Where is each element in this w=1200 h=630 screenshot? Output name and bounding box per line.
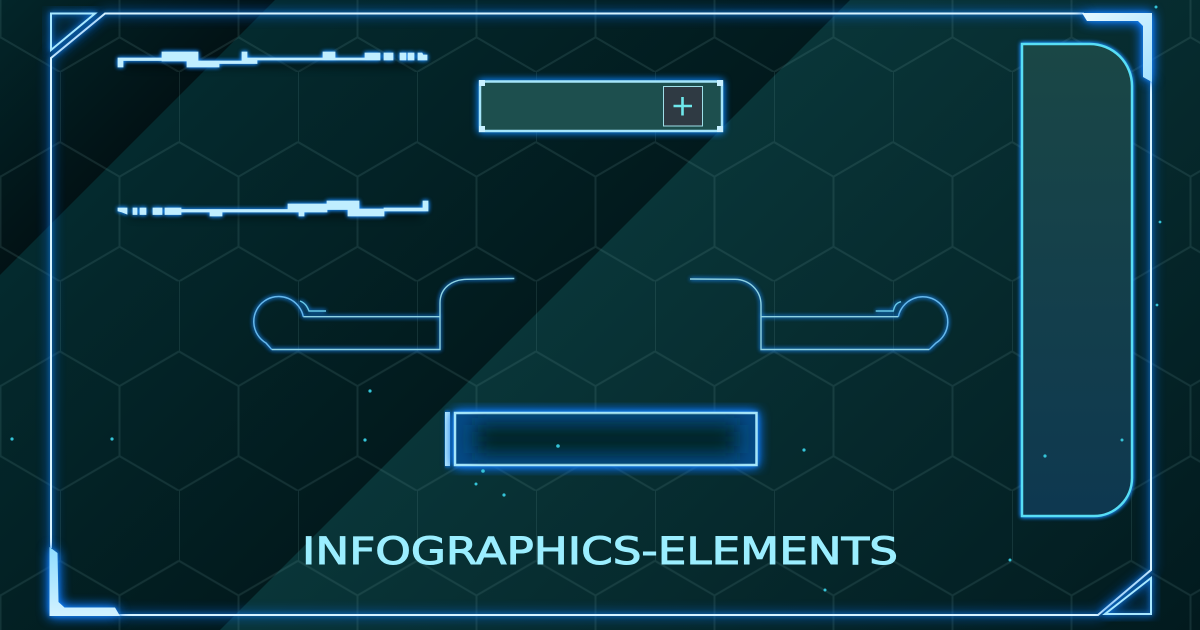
corner squares [479, 80, 723, 132]
plus button [664, 86, 702, 126]
tech divider bar: lower [118, 201, 428, 218]
bracket ornament: right [690, 279, 948, 350]
small accent [300, 301, 326, 311]
corner: top-right thick bracket [1082, 13, 1152, 82]
circular end [254, 297, 303, 350]
tall side panel [1022, 44, 1132, 516]
tech divider bar: top [118, 52, 427, 68]
button panel body [480, 82, 722, 131]
body lines [272, 278, 514, 350]
inner dark glow [475, 425, 737, 453]
corner: bottom-left thick bracket [50, 547, 120, 616]
bar frame [455, 413, 756, 465]
empty bar panel [445, 412, 756, 466]
circular end [898, 297, 948, 350]
bracket ornament: left [254, 278, 514, 350]
corner: bottom-right triangle [1105, 578, 1151, 614]
button panel with plus [479, 80, 723, 132]
title: INFOGRAPHICS-ELEMENTS [302, 530, 898, 573]
body lines [690, 279, 929, 350]
side tick [445, 412, 450, 466]
small accent [876, 302, 901, 311]
corner: top-left triangle [51, 14, 95, 50]
